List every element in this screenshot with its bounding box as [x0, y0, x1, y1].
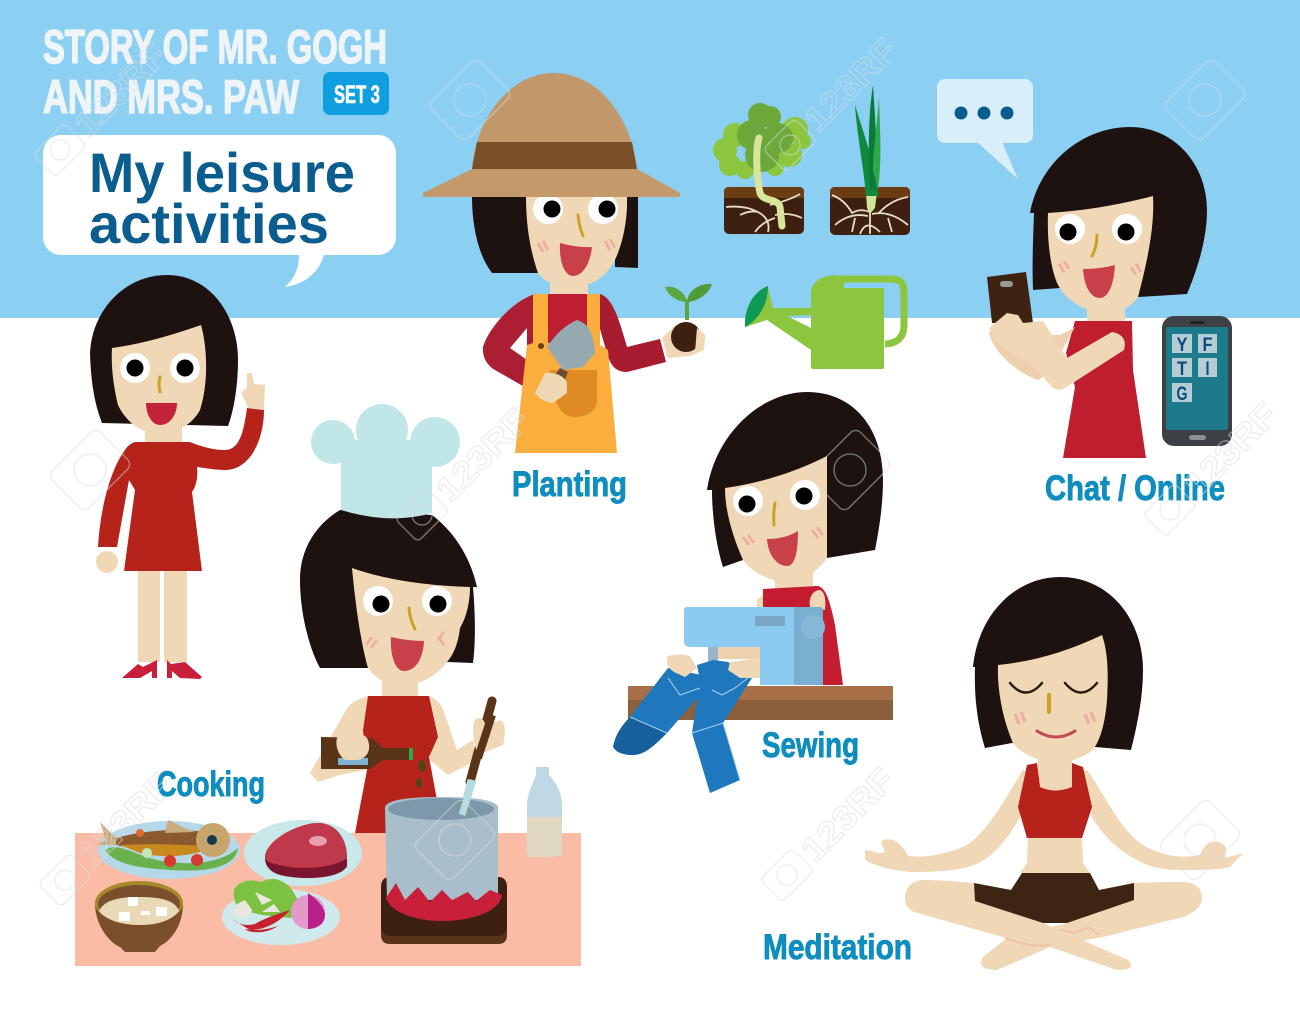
character: chatting woman with phone: [987, 127, 1207, 458]
character: standing woman in red dress: [90, 275, 265, 679]
icon: steak on plate: [244, 820, 362, 886]
stock watermark overlay: 123RF: [67, 36, 175, 144]
label: cooking: Cooking: [157, 765, 265, 804]
icon: green onion seedling in soil: [830, 85, 910, 235]
speech bubble heading: activities: [89, 192, 329, 255]
icon: smartphone with app tiles: G: [1176, 384, 1188, 405]
stock watermark overlay: 123RF: [429, 401, 537, 509]
icon: smartphone with app tiles: I: [1206, 359, 1210, 380]
icon: soup bowl: [95, 881, 183, 952]
title: AND MRS. PAW: [43, 70, 299, 123]
stock watermark overlay: 123RF: [797, 31, 905, 139]
label: meditation: Meditation: [763, 928, 912, 967]
stock watermark overlay: 123RF: [794, 761, 902, 869]
icon: smartphone with app tiles: Y: [1176, 335, 1188, 356]
icon: smartphone with app tiles: [1162, 316, 1232, 446]
badge: set 3: SET 3: [334, 81, 380, 109]
stock watermark overlay: 123RF: [1177, 396, 1285, 504]
icon: wooden spoon with hand: [462, 701, 505, 815]
icon: cooking pot on stove: [381, 780, 507, 944]
icon: chat bubble with dots: [937, 79, 1033, 179]
table cloth: [75, 833, 581, 966]
icon: watering can: [745, 275, 904, 369]
label: sewing: Sewing: [762, 726, 859, 765]
character: chef woman cooking: [300, 404, 477, 833]
title: STORY OF MR. GOGH: [43, 20, 387, 73]
icon: vegetables on plate: [222, 879, 340, 945]
icon: smartphone with app tiles: T: [1177, 359, 1187, 380]
sky blue header band: [0, 0, 1300, 318]
badge: set 3: [323, 72, 389, 115]
icon: soy sauce bottle: [321, 732, 426, 788]
label: chat online: Chat / Online: [1045, 469, 1225, 508]
character: sewing woman at machine: [613, 392, 893, 793]
icon: milk bottle: [527, 767, 562, 857]
icon: fish on plate: [97, 820, 240, 879]
stock watermark overlay: 123RF: [72, 766, 180, 874]
speech bubble heading: My leisure: [89, 141, 355, 204]
speech bubble heading: [43, 135, 396, 287]
icon: smartphone with app tiles: F: [1202, 335, 1212, 356]
character: meditating woman: [865, 577, 1243, 970]
character: planting woman with hat, apron and trowel: [423, 73, 712, 453]
icon: lettuce seedling in soil: [713, 103, 811, 234]
title: [43, 20, 387, 123]
label: planting: Planting: [512, 465, 627, 504]
